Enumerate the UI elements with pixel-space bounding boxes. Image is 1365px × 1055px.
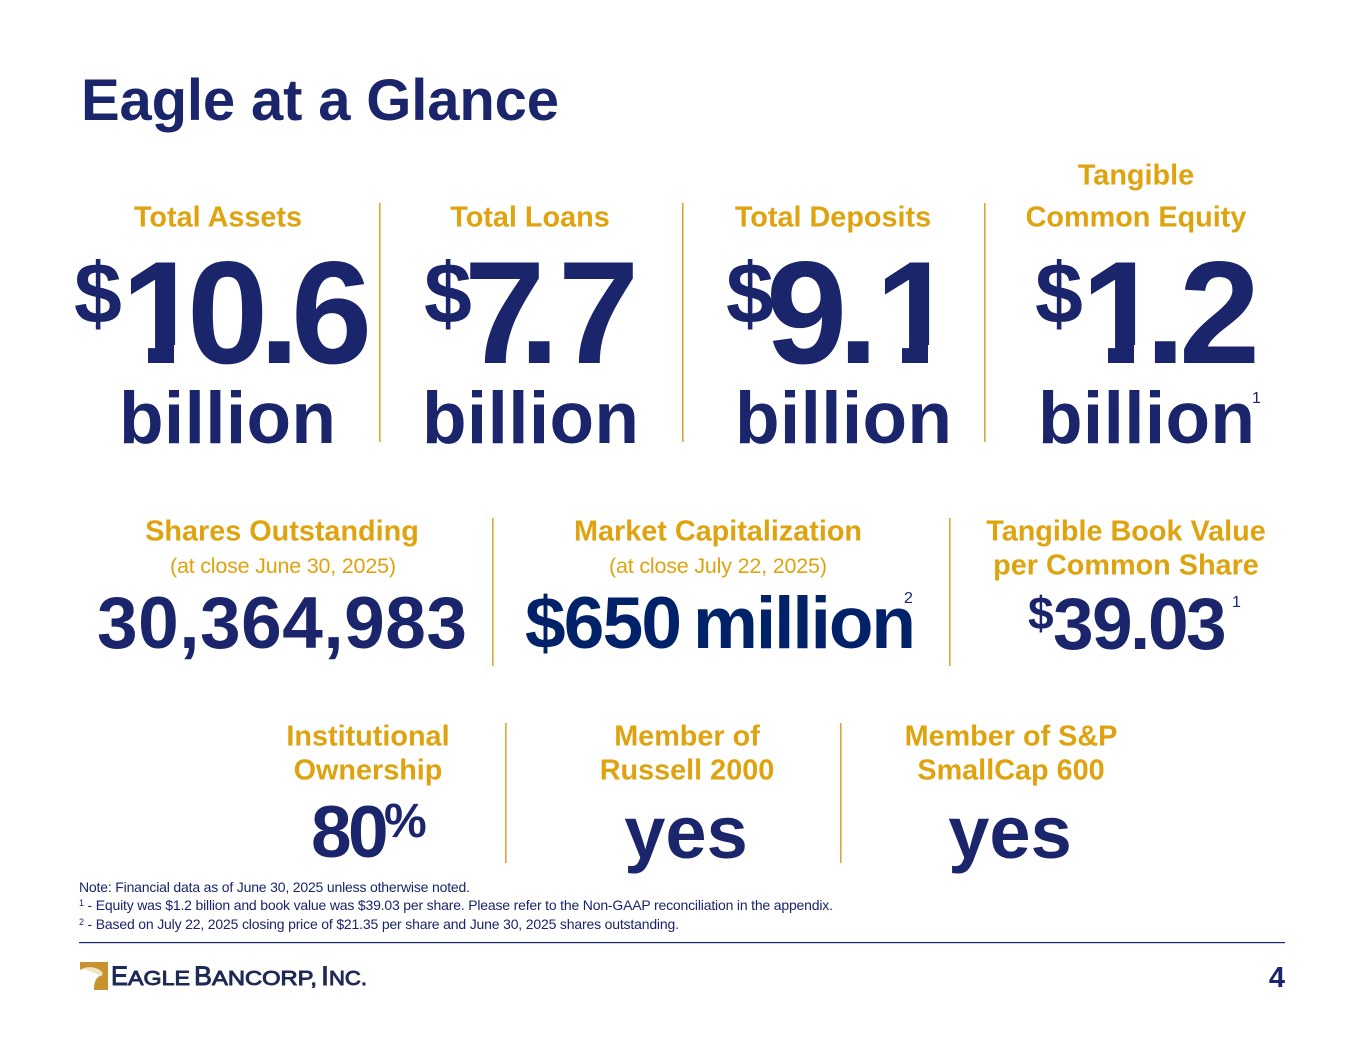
wordmark: B [194, 961, 212, 991]
page number: 4 [1269, 962, 1285, 994]
label: member of s&p smallcap 600 [905, 720, 1117, 786]
panel: shares outstanding [97, 516, 467, 664]
label: member of russell 2000: Member of [614, 720, 760, 752]
wordmark: E [111, 961, 128, 991]
label: member of russell 2000: Russell 2000 [600, 754, 774, 786]
footnotes: 2 [79, 917, 84, 927]
value: yes: yes [624, 791, 748, 874]
wordmark: NC. [329, 968, 367, 990]
value: $7.7: 7.7 [464, 231, 639, 394]
label: institutional ownership [286, 720, 450, 786]
label: member of russell 2000 [600, 720, 774, 786]
label: tangible book value: per Common Share [993, 550, 1259, 582]
note: at close July 22, 2025: (at close July 22, 2025) [609, 554, 827, 578]
value: $1.2 [1035, 231, 1260, 394]
label: total loans: Total Loans [450, 202, 610, 234]
label: total deposits: Total Deposits [735, 202, 931, 234]
panel: tangible common equity [1026, 160, 1261, 459]
value: $9.1: 1 [875, 231, 956, 394]
label: total assets: Total Assets [134, 202, 302, 234]
wordmark: ANCORP, [212, 968, 317, 990]
value: $10.6: 0.6 [187, 231, 372, 394]
label: member of s&p smallcap 600: Member of S&P [905, 720, 1117, 752]
footnote marker 1: 1 [1232, 594, 1241, 611]
value: $1.2: $ [1035, 246, 1083, 342]
label: institutional ownership: Institutional [286, 720, 450, 752]
icon: eagle [80, 962, 108, 990]
value: $1.2: 1 [1081, 231, 1162, 394]
label: tangible book value [986, 516, 1266, 582]
panel: tangible book value [986, 516, 1266, 665]
label: tangible common equity [1026, 160, 1246, 234]
wordmark: AGLE [128, 968, 190, 990]
value: $650 million: million [693, 583, 916, 664]
value: 80% [311, 792, 427, 873]
value: yes: yes [948, 791, 1072, 874]
panel: total deposits [726, 202, 964, 459]
value: $39.03: $ [1028, 587, 1054, 639]
label: tangible book value: Tangible Book Value [986, 516, 1266, 548]
value: $10.6 [74, 231, 372, 394]
footnotes: Note: Financial data as of June 30, 2025 unless otherwise noted. [79, 879, 470, 895]
unit: billion: billion [1038, 378, 1255, 459]
footnote marker 1: 1 [1252, 390, 1261, 407]
logo: eagle bancorp [80, 961, 367, 991]
value: $9.1: $ [726, 246, 774, 342]
label: member of s&p smallcap 600: SmallCap 600 [917, 754, 1105, 786]
label: market capitalization: Market Capitalization [574, 516, 862, 548]
value: 80%: % [384, 795, 427, 848]
panel: total loans [422, 202, 639, 459]
wordmark: I [321, 961, 329, 991]
value: $1.2: .2 [1145, 231, 1260, 394]
value: $7.7: $ [424, 246, 472, 342]
label: tangible common equity: Tangible [1078, 160, 1194, 192]
unit: billion: billion [119, 378, 336, 459]
panel: total assets [74, 202, 372, 459]
value: $650 million: $650 [525, 583, 682, 664]
value: $650 million [525, 583, 916, 664]
panel: s&p smallcap 600 [905, 720, 1117, 874]
value: $39.03: 39.03 [1053, 584, 1227, 665]
value: $10.6: 1 [121, 231, 202, 394]
footnotes: - Based on July 22, 2025 closing price of $21.35 per share and June 30, 2025 shares outstanding. [84, 916, 679, 932]
label: institutional ownership: Ownership [294, 754, 442, 786]
note: at close June 30, 2025: (at close June 30, 2025) [170, 554, 396, 578]
footnotes: - Equity was $1.2 billion and book value was $39.03 per share. Please refer to the Non-GAAP reconciliation in the appendix. [84, 897, 833, 913]
unit: billion: billion [735, 378, 952, 459]
value: $10.6: $ [74, 246, 122, 342]
panel: institutional ownership [286, 720, 450, 873]
value: $9.1: 9. [766, 231, 879, 394]
footnotes: 1 [79, 898, 84, 908]
footnotes [79, 879, 833, 932]
wordmark [111, 961, 367, 991]
title: Eagle at a Glance [81, 68, 559, 133]
panel: russell 2000 [600, 720, 774, 874]
footnote marker 2: 2 [904, 590, 913, 607]
value: shares: 30,364,983 [97, 583, 467, 664]
panel: market capitalization [525, 516, 916, 664]
value: 80%: 80 [311, 792, 389, 873]
value: $9.1 [726, 231, 964, 394]
label: shares outstanding: Shares Outstanding [145, 516, 419, 548]
unit: billion: billion [422, 378, 639, 459]
label: tangible common equity: Common Equity [1026, 202, 1246, 234]
